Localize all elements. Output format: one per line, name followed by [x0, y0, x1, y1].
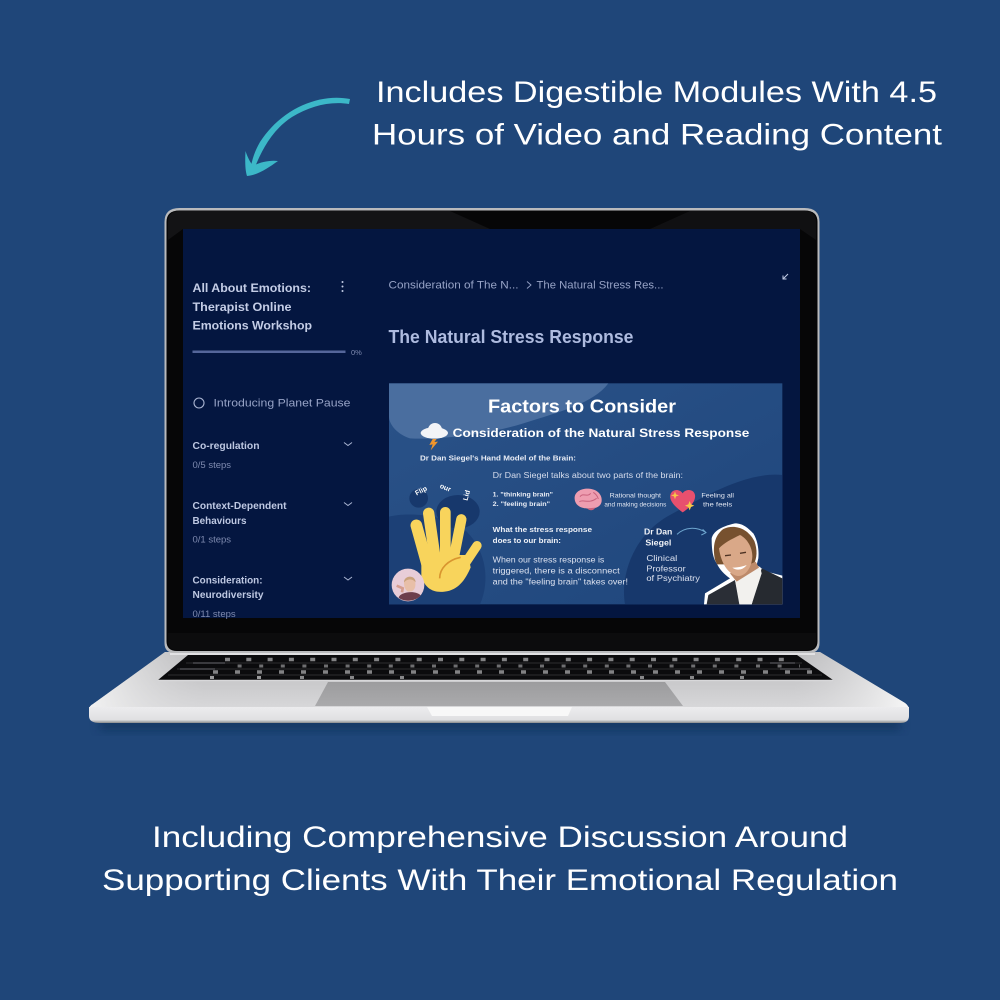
bottom caption: Including Comprehensive Discussion Around	[152, 821, 848, 854]
breadcrumb: Consideration of The N...	[388, 280, 518, 292]
small arrow	[677, 528, 706, 535]
stress response text: When our stress response is	[493, 556, 604, 565]
slide subtitle: Consideration of the Natural Stress Response	[453, 426, 750, 440]
brain parts list: 1. "thinking brain"	[493, 492, 553, 499]
course title: All About Emotions:	[192, 281, 311, 295]
bottom caption	[102, 821, 898, 897]
sidebar	[192, 281, 362, 620]
top caption: Hours of Video and Reading Content	[372, 118, 942, 152]
intro text: Dr Dan Siegel talks about two parts of the brain:	[493, 471, 683, 480]
course title	[192, 281, 312, 332]
feeling caption: Feeling all	[701, 493, 734, 499]
breadcrumb: The Natural Stress Res...	[536, 280, 664, 292]
module: neurodiversity: Consideration:	[192, 576, 262, 586]
dr dan siegel label: Dr Dan	[644, 527, 672, 536]
job title	[646, 554, 700, 583]
portrait	[704, 523, 782, 604]
breadcrumb	[388, 280, 664, 292]
job title: Professor	[646, 564, 686, 573]
module: neurodiversity: 0/11 steps	[192, 609, 236, 620]
menu dots icon	[342, 281, 344, 292]
hand icon	[416, 512, 477, 592]
stress response heading	[493, 525, 592, 545]
module: co-regulation: Co-regulation	[192, 441, 260, 452]
rational caption	[604, 493, 666, 509]
arrow icon	[245, 98, 350, 176]
brain parts list: 2. "feeling brain"	[493, 501, 550, 508]
progress bar: 0%	[351, 348, 362, 357]
laptop	[89, 208, 909, 730]
laptop shadow	[100, 718, 900, 730]
cloud icon	[421, 423, 448, 450]
stress response text: triggered, there is a disconnect	[493, 567, 621, 576]
collapse icon	[783, 274, 788, 279]
module: neurodiversity	[192, 576, 352, 620]
slide title: Factors to Consider	[488, 395, 676, 416]
brain icon	[575, 489, 602, 510]
stress response heading: does to our brain:	[493, 536, 561, 545]
stress response text	[493, 556, 628, 586]
module: context-dependent	[192, 501, 352, 546]
flip our lid label: our	[439, 483, 452, 494]
course title: Therapist Online	[192, 300, 292, 314]
rational caption: Rational thought	[610, 493, 661, 499]
lesson item: Introducing Planet Pause	[214, 398, 350, 410]
stress response text: and the "feeling brain" takes over!	[493, 577, 628, 586]
laptop base	[89, 652, 909, 723]
slide background blobs	[389, 383, 782, 604]
flip our lid label	[414, 483, 472, 502]
top caption	[372, 76, 942, 152]
presenter avatar	[392, 569, 424, 601]
job title: Clinical	[646, 554, 678, 563]
bottom caption: Supporting Clients With Their Emotional Regulation	[102, 864, 898, 897]
slide panel	[389, 383, 782, 604]
hand model heading: Dr Dan Siegel's Hand Model of the Brain:	[420, 453, 576, 462]
laptop lid	[164, 208, 820, 653]
screen	[183, 229, 800, 618]
lesson heading: The Natural Stress Response	[388, 327, 634, 347]
flip our lid label: Lid	[463, 490, 472, 502]
module: context-dependent: 0/1 steps	[192, 534, 231, 546]
module: context-dependent: Behaviours	[192, 516, 247, 527]
trackpad	[315, 682, 683, 706]
module: co-regulation	[192, 441, 352, 471]
feeling caption	[701, 493, 734, 509]
dr dan siegel label: Siegel	[645, 539, 671, 548]
module: co-regulation: 0/5 steps	[192, 460, 231, 471]
flip our lid label: Flip	[414, 485, 429, 497]
job title: of Psychiatry	[646, 574, 700, 583]
brain parts list	[493, 492, 553, 508]
feeling caption: the feels	[703, 503, 732, 509]
dr dan siegel label	[644, 527, 672, 548]
heart icon	[670, 490, 695, 512]
top caption: Includes Digestible Modules With 4.5	[376, 76, 937, 109]
module: neurodiversity: Neurodiversity	[192, 590, 264, 601]
rational caption: and making decisions	[604, 503, 666, 509]
module: context-dependent: Context-Dependent	[192, 501, 287, 512]
course title: Emotions Workshop	[192, 318, 312, 332]
keyboard	[158, 654, 833, 680]
stress response heading: What the stress response	[493, 525, 592, 534]
